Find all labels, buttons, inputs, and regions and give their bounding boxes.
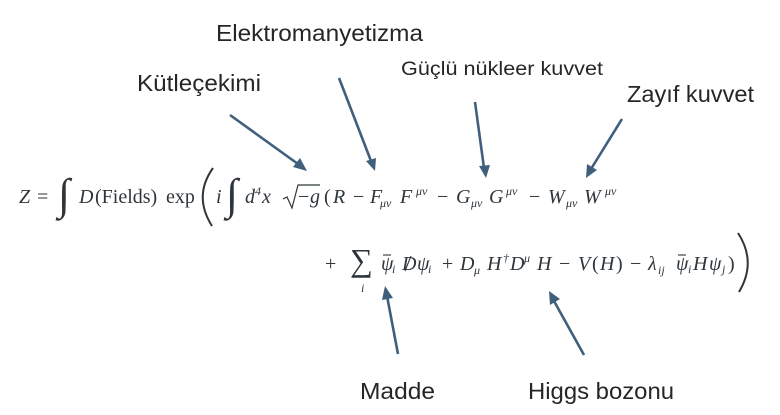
- equation line 1: R: [332, 186, 345, 208]
- equation line 1: μν: [379, 196, 392, 210]
- equation line 1: W: [584, 186, 603, 208]
- label: Zayıf kuvvet: Zayıf kuvvet: [627, 81, 755, 107]
- equation line 2: (: [592, 253, 599, 275]
- equation line 1: μν: [604, 184, 617, 198]
- equation line 1: [19, 168, 617, 226]
- equation line 2: λ: [647, 253, 657, 275]
- equation line 2: ψ: [381, 253, 394, 275]
- equation line 1: D: [78, 186, 94, 208]
- equation line 2: D: [401, 253, 417, 275]
- equation line 1: −: [298, 186, 309, 208]
- equation line 1: −: [437, 186, 448, 208]
- equation line 2: ij: [658, 263, 665, 277]
- equation line 1: i: [216, 186, 222, 208]
- arrow: weak force: [586, 119, 622, 178]
- equation line 2: [325, 233, 748, 295]
- equation line 1: G: [489, 186, 504, 208]
- label: Madde: Madde: [360, 378, 435, 404]
- equation line 2: ψ: [709, 253, 722, 275]
- equation line 1: ∫: [55, 170, 73, 221]
- equation line 2: ): [616, 253, 623, 275]
- equation line 2: μ: [473, 263, 480, 277]
- equation line 1: 4: [255, 184, 261, 198]
- label: Güçlü nükleer kuvvet: Güçlü nükleer kuvvet: [401, 58, 604, 80]
- equation line 1: (Fields): [95, 186, 157, 208]
- equation line 1: G: [456, 186, 471, 208]
- equation line 2: j: [720, 262, 726, 276]
- equation line 2: H: [692, 253, 709, 275]
- equation line 2: D: [459, 253, 475, 275]
- equation line 2: i: [392, 262, 395, 276]
- arrow: electromagnetism: [339, 78, 376, 171]
- equation line 2: i: [361, 281, 364, 295]
- equation line 1: F: [399, 186, 413, 208]
- label: Higgs bozonu: Higgs bozonu: [528, 378, 674, 404]
- equation line 1: W: [548, 186, 567, 208]
- equation line 1: μν: [505, 184, 518, 198]
- equation line 1: =: [37, 186, 48, 208]
- equation line 1: g: [310, 186, 320, 208]
- equation line 2: i: [428, 262, 431, 276]
- equation line 2: ψ: [417, 253, 430, 275]
- equation line 2: ∑: [350, 242, 373, 278]
- equation line 2: −: [630, 253, 641, 275]
- equation line 2: +: [325, 253, 336, 275]
- equation line 2: μ: [523, 251, 530, 265]
- equation line 2: ψ: [676, 253, 689, 275]
- equation line 1: μν: [470, 196, 483, 210]
- arrow: Higgs: [549, 291, 584, 355]
- equation line 1: x: [261, 186, 271, 208]
- equation line 1: −: [529, 186, 540, 208]
- equation line 1: exp: [166, 186, 195, 208]
- equation line 2: i: [688, 262, 691, 276]
- equation line 1: (: [324, 186, 331, 208]
- arrow: matter: [382, 286, 398, 354]
- equation line 2: H: [599, 253, 616, 275]
- equation line 2: ): [728, 253, 735, 275]
- equation line 1: Z: [19, 186, 31, 208]
- label: Kütleçekimi: Kütleçekimi: [137, 70, 261, 96]
- equation line 1: μν: [415, 184, 428, 198]
- equation line 2: †: [503, 251, 510, 265]
- arrow: gravity: [230, 115, 307, 171]
- equation line 1: μν: [565, 196, 578, 210]
- equation line 1: d: [245, 186, 256, 208]
- equation line 1: F: [369, 186, 383, 208]
- equation line 2: V: [578, 253, 593, 275]
- equation line 2: H: [486, 253, 503, 275]
- label: Elektromanyetizma: Elektromanyetizma: [216, 20, 423, 46]
- equation line 2: H: [536, 253, 553, 275]
- equation line 2: D: [509, 253, 525, 275]
- equation line 1: −: [353, 186, 364, 208]
- equation line 2: −: [559, 253, 570, 275]
- equation line 1: ∫: [223, 170, 241, 221]
- arrow: strong force: [475, 102, 490, 178]
- equation line 2: +: [442, 253, 453, 275]
